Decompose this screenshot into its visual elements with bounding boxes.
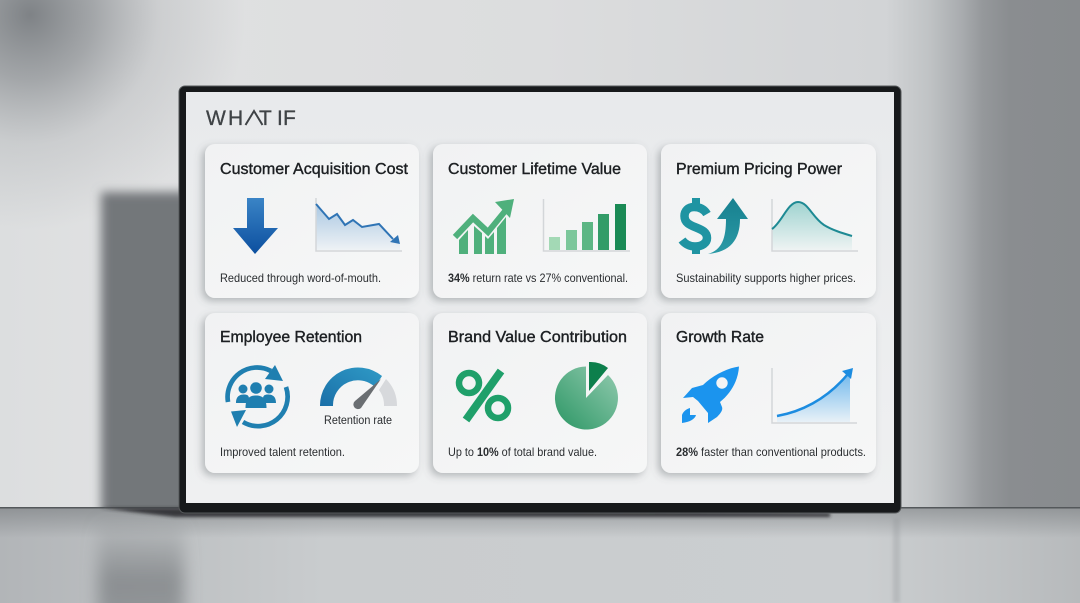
heading: Employee Retention: [220, 329, 362, 346]
screen: [186, 92, 894, 503]
caption: Improved talent retention.: [220, 445, 345, 459]
pie chart: [555, 362, 618, 429]
caption: Up to 10% of total brand value.: [448, 445, 597, 459]
icon: dollar with up arrow: [682, 198, 748, 254]
gauge: retention rate: [320, 367, 397, 427]
bar chart: [544, 199, 630, 251]
icon: down arrow: [233, 198, 278, 254]
heading: Customer Lifetime Value: [448, 161, 621, 178]
panel: customer acquisition cost: [205, 144, 419, 298]
chart: price curve: [772, 199, 858, 251]
caption: Sustainability supports higher prices.: [676, 271, 856, 285]
chart: growth curve: [772, 368, 857, 423]
heading: Customer Acquisition Cost: [220, 161, 409, 178]
icon: people in cycle: [228, 365, 288, 427]
heading: Growth Rate: [676, 329, 764, 346]
heading: Premium Pricing Power: [676, 161, 843, 178]
icon: percent: [459, 371, 508, 420]
heading: Brand Value Contribution: [448, 329, 627, 346]
panel: premium pricing power: [661, 144, 876, 298]
chart: declining line: [316, 198, 402, 251]
panel: growth rate: [661, 313, 876, 473]
panel: brand value contribution: [433, 313, 647, 473]
panel: employee retention: [205, 313, 419, 473]
logo: WHAT IF: WHAT IF: [206, 107, 296, 130]
icon: growth arrow over bars: [455, 199, 514, 254]
caption: Reduced through word-of-mouth.: [220, 271, 381, 285]
frame shadow on wall: [101, 192, 201, 518]
display frame: [179, 86, 901, 513]
panel: customer lifetime value: [433, 144, 647, 298]
caption: 34% return rate vs 27% conventional.: [448, 271, 628, 285]
floor: [0, 507, 1080, 603]
gauge: retention rate: Retention rate: [324, 415, 392, 427]
icon: rocket: [682, 366, 739, 423]
caption: 28% faster than conventional products.: [676, 445, 866, 459]
